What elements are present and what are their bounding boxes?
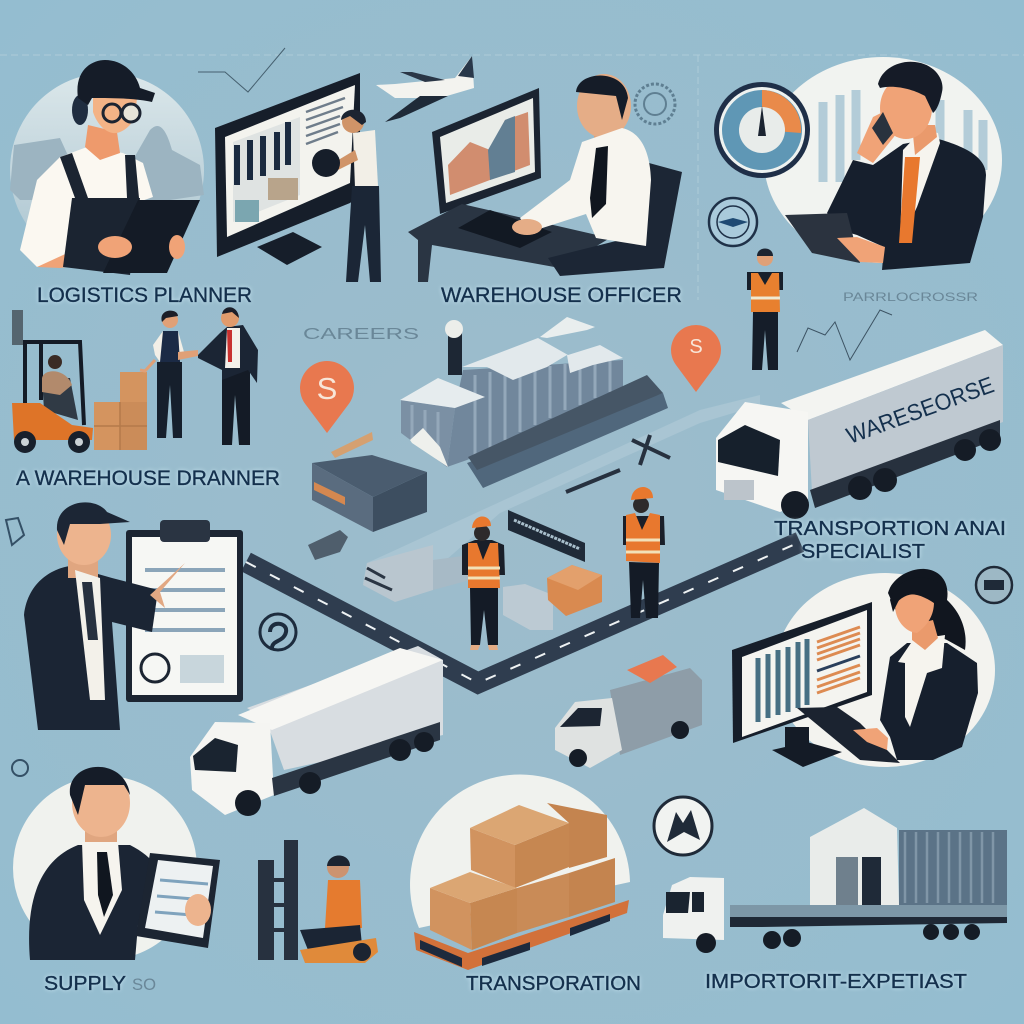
icon: location pin right: S — [689, 336, 703, 358]
figure: worker right — [623, 487, 665, 618]
small depot — [312, 432, 427, 532]
icon: location pin s — [300, 361, 354, 433]
icon: swirl left — [12, 760, 28, 776]
roads — [246, 542, 800, 683]
figure: officer — [512, 74, 682, 276]
figure: worker at monitor — [312, 110, 381, 282]
propeller on road — [566, 435, 670, 492]
icon: desk monitor — [432, 88, 541, 214]
icon: clipboard — [126, 520, 243, 702]
boxes stack — [94, 372, 147, 450]
label: transportion anai: TRANSPORTION ANAI — [774, 518, 1006, 540]
desk — [408, 204, 610, 282]
icon: location pin s: S — [317, 371, 337, 406]
label: faded top right: PARRLOCROSSR — [843, 290, 978, 304]
label: specialist: SPECIALIST — [801, 541, 925, 563]
figure: forklift driver — [258, 840, 378, 963]
icon: forklift — [12, 342, 93, 453]
delivery van — [363, 545, 470, 602]
panel: middle truck — [190, 646, 443, 816]
figure: planner — [20, 60, 200, 275]
label: supply: SUPPLY — [44, 973, 126, 995]
box stack — [430, 803, 615, 950]
icon: compass badge — [709, 198, 757, 246]
panel: large truck top right: WARESEORSE — [843, 371, 997, 449]
label: supply faded: SO — [132, 975, 156, 994]
panel: site workers — [363, 435, 670, 650]
figure: worker centre — [462, 516, 505, 650]
icon: badge left road — [260, 614, 296, 650]
icon: monitor — [732, 602, 872, 767]
panel: warehouse officer at desk — [408, 74, 682, 282]
panel: analyst woman at monitor — [732, 569, 995, 767]
figure: analyst — [785, 62, 986, 270]
sign board — [508, 510, 585, 562]
panel: forklift and handshake — [12, 307, 258, 453]
panel: inspector with clipboard — [24, 502, 243, 730]
panel: small van with parcel — [555, 655, 702, 768]
figure: man handshake — [198, 307, 258, 445]
panel: logistics planner — [10, 60, 204, 275]
pale service road — [363, 395, 760, 600]
icon: circular badge mountains — [654, 797, 712, 855]
keyboard — [458, 210, 552, 248]
figure: safety worker top right — [747, 248, 783, 370]
sketch: mountain lines — [797, 310, 892, 360]
label: warehouse officer: WAREHOUSE OFFICER — [441, 284, 682, 307]
small grey icon — [308, 530, 348, 560]
figure: supply specialist — [29, 767, 220, 960]
icon: location pin right — [671, 325, 721, 392]
icon: small dial — [635, 84, 675, 124]
icon: large monitor — [215, 73, 360, 265]
panel: boxes on pallet — [410, 774, 630, 970]
panel: supply specialist — [13, 767, 220, 960]
pallet — [414, 900, 629, 970]
label: transporation: TRANSPORATION — [466, 973, 641, 995]
panel: flatbed truck and warehouse — [663, 808, 1007, 953]
panel: central warehouse — [400, 317, 668, 488]
icon: gauge — [714, 82, 810, 178]
label: a warehouse dranner: A WAREHOUSE DRANNER — [16, 467, 280, 490]
icon: round badge right — [976, 567, 1012, 603]
label: faded careers: CAREERS — [303, 326, 419, 343]
icon: boxes — [547, 565, 602, 616]
figure: woman handshake — [140, 311, 198, 438]
panel: transportation analyst on phone — [714, 57, 1002, 270]
icon: left logo mark — [6, 518, 24, 545]
label: import export: IMPORTORIT-EXPETIAST — [705, 971, 967, 993]
icon: airplane — [376, 56, 474, 122]
figure: woman — [797, 569, 978, 763]
figure: inspector — [24, 502, 185, 730]
label: logistics planner: LOGISTICS PLANNER — [37, 284, 252, 307]
panel: large truck top right — [716, 330, 1003, 519]
panel: monitor and worker — [215, 73, 381, 282]
icon: barrels — [503, 584, 553, 630]
